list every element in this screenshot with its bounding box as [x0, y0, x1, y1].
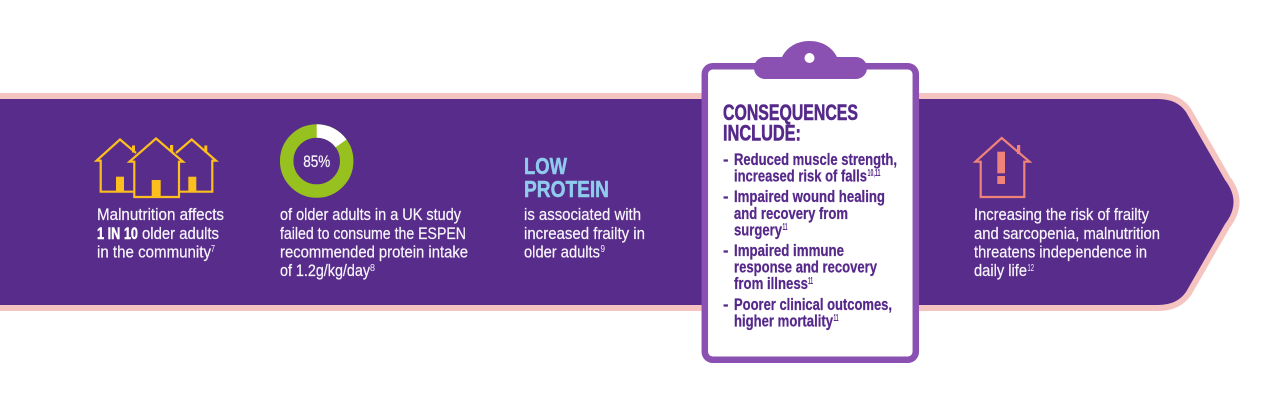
text: independence: daily life: [974, 262, 1027, 280]
text: 85 percent: of 1.2g/kg/day: [280, 262, 371, 280]
text: 1 in 10: [97, 206, 224, 262]
text: independence: threatens independence in: [974, 244, 1147, 262]
text: low protein: older adults: [524, 244, 600, 262]
list: consequences: 10,11: [868, 168, 881, 179]
panel: independence: [974, 138, 1160, 280]
list: consequences: surgery: [734, 222, 783, 240]
panel: clipboard consequences: [705, 41, 916, 360]
list: consequences: -: [723, 151, 728, 169]
heading: low protein: PROTEIN: [524, 176, 609, 202]
list: consequences: higher mortality: [734, 313, 834, 331]
text: 1 in 10: 1 IN 10: [97, 225, 138, 243]
text: 85 percent: [280, 206, 468, 280]
text: low protein: is associated with: [524, 206, 641, 224]
text: 1 in 10: 7: [211, 244, 215, 255]
icon: clipboard: [705, 41, 916, 360]
icon: house with exclamation mark: [976, 138, 1030, 197]
text: 85 percent: 8: [370, 263, 375, 274]
heading: consequences: CONSEQUENCES: [723, 100, 858, 125]
list: consequences: -: [723, 188, 728, 206]
panel: low protein: [524, 153, 645, 262]
panel: 85 percent: [280, 131, 468, 280]
list: consequences: Impaired wound healing: [734, 188, 885, 206]
list: consequences: response and recovery: [734, 259, 878, 277]
text: independence: [974, 206, 1160, 280]
text: low protein: 9: [600, 244, 605, 255]
text: independence: 12: [1028, 263, 1034, 274]
list: consequences: -: [723, 296, 728, 314]
text: 85 percent: failed to consume the ESPEN: [280, 225, 466, 243]
text: 85 percent: recommended protein intake: [280, 244, 468, 262]
list: consequences: Impaired immune: [734, 242, 844, 260]
list: consequences: 11: [808, 276, 813, 287]
icon: three houses: [96, 138, 216, 197]
text: independence: Increasing the risk of frailty: [974, 206, 1150, 224]
chart: donut 85%: [287, 131, 347, 191]
panel: 1 in 10: [96, 138, 224, 262]
text: 85 percent: of older adults in a UK study: [280, 206, 462, 224]
text: 1 in 10: in the community: [97, 244, 212, 262]
heading: consequences: [723, 100, 858, 146]
list: consequences: -: [723, 242, 728, 260]
text: 1 in 10: older adults: [142, 225, 219, 243]
chart: donut 85%: 85%: [303, 153, 330, 171]
heading: low protein: [524, 153, 609, 202]
text: independence: and sarcopenia, malnutrition: [974, 225, 1160, 243]
list: consequences: 11: [834, 313, 839, 324]
list: consequences: and recovery from: [734, 205, 848, 223]
list: consequences: from illness: [734, 275, 808, 293]
heading: consequences: INCLUDE:: [723, 120, 801, 146]
list: consequences: Reduced muscle strength,: [734, 151, 897, 169]
list: consequences: Poorer clinical outcomes,: [734, 296, 892, 314]
text: 1 in 10: Malnutrition affects: [97, 206, 224, 224]
list: consequences: increased risk of falls: [734, 168, 867, 186]
heading: low protein: LOW: [524, 153, 567, 179]
text: low protein: increased frailty in: [524, 225, 645, 243]
arrow band: [0, 99, 1234, 305]
list: consequences: [723, 151, 897, 331]
list: consequences: 11: [782, 222, 788, 233]
text: low protein: [524, 206, 645, 262]
